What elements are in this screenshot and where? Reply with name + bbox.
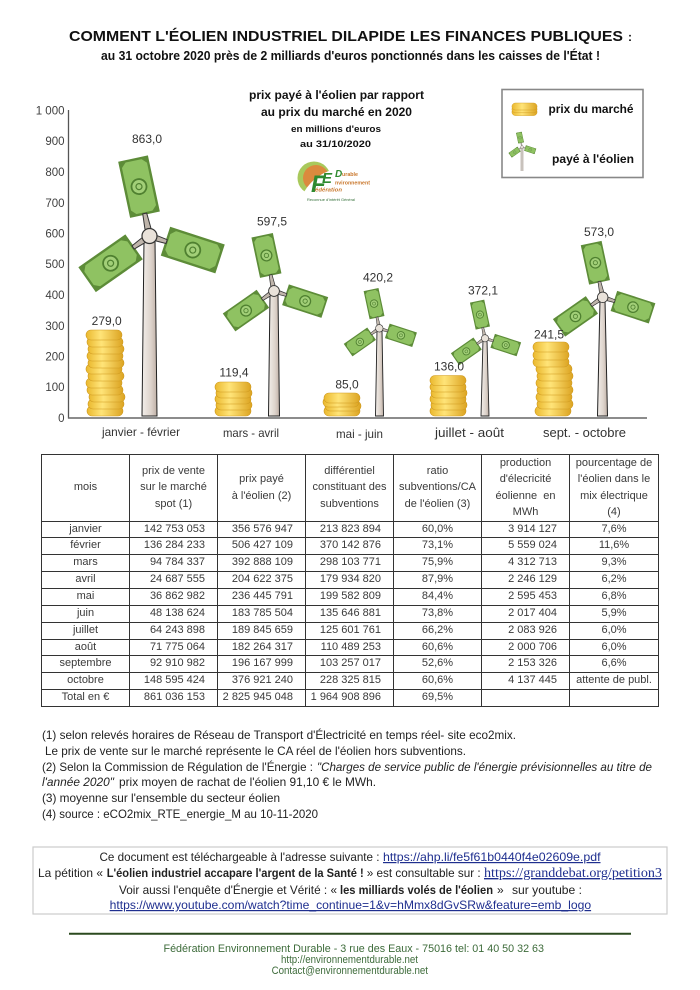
data table: 6,8%: [601, 590, 627, 602]
x axis labels: mars - avril: [223, 426, 279, 440]
data table: 84,4%: [422, 590, 453, 602]
links box: La pétition «: [38, 866, 103, 880]
links box: Ce document est téléchargeable à l'adresse suivante :: [100, 850, 380, 864]
data table: d'élecricité: [500, 473, 551, 485]
data table: 228 325 815: [320, 674, 381, 686]
data table: 24 687 555: [150, 573, 205, 585]
data table: 5,9%: [601, 607, 627, 619]
data table: (4): [607, 506, 621, 518]
logo: F: [311, 171, 327, 198]
data table: juillet: [73, 624, 98, 636]
footer: Fédération Environnement Durable - 3 rue des Eaux - 75016 tel: 01 40 50 32 63: [164, 943, 544, 955]
data table: 2 000 706: [508, 641, 557, 653]
data table: 136 284 233: [144, 539, 205, 551]
data table: 182 264 317: [232, 641, 293, 653]
links box: https://granddebat.org/petition3: [484, 866, 662, 881]
data table: 356 576 947: [232, 522, 293, 534]
data table: mars: [73, 556, 98, 568]
column: mars-avril turbine: [224, 234, 327, 416]
data table: Total en €: [62, 691, 109, 703]
value labels: 420,2: [363, 270, 393, 284]
column: sept-octobre turbine: [554, 242, 654, 416]
data table: 60,0%: [422, 522, 453, 534]
data table: 48 138 624: [150, 607, 205, 619]
data table: 6,2%: [601, 573, 627, 585]
data table: 103 257 017: [320, 657, 381, 669]
footnotes: (1) selon relevés horaires de Réseau de Transport d'Électricité en temps réel- site eco2mix.: [42, 727, 516, 742]
value labels: 136,0: [434, 360, 464, 374]
icon: coin stack: [512, 103, 537, 116]
chart heading: prix payé à l'éolien par rapport: [249, 88, 424, 102]
column: juillet-août turbine: [452, 300, 520, 416]
data table: 64 243 898: [150, 624, 205, 636]
y axis: 1 000: [36, 106, 64, 118]
links box: sur youtube :: [512, 883, 582, 897]
data table: 142 753 053: [144, 522, 205, 534]
data table: 2 083 926: [508, 624, 557, 636]
chart heading: au 31/10/2020: [300, 139, 371, 150]
data table: subventions: [320, 498, 379, 510]
data table: 4 312 713: [508, 556, 557, 568]
data table: 125 601 761: [320, 624, 381, 636]
data table: février: [70, 539, 101, 551]
data table: différentiel: [324, 465, 375, 477]
value labels: [92, 132, 614, 392]
data table: 6,0%: [601, 624, 627, 636]
x axis labels: [101, 425, 626, 441]
data table: l'éolien dans le: [578, 473, 650, 485]
footnotes: (2) Selon la Commission de Régulation de l'Énergie :: [42, 759, 313, 774]
data table: 7,6%: [601, 522, 627, 534]
data table: 298 103 771: [320, 556, 381, 568]
data table: prix de vente: [142, 465, 205, 477]
value labels: 119,4: [219, 366, 249, 380]
value labels: 863,0: [132, 132, 162, 146]
value labels: 85,0: [335, 378, 359, 392]
subtitle: au 31 octobre 2020 près de 2 milliards d'euros ponctionnés dans les caisses de l'État !: [101, 48, 600, 63]
footnotes: (4) source : eCO2mix_RTE_energie_M au 10-11-2020: [42, 807, 318, 821]
links box: [33, 847, 667, 914]
column: sept-octobre coins: [533, 342, 573, 416]
data table: 2 017 404: [508, 607, 557, 619]
y axis: 600: [45, 228, 64, 240]
data table: pourcentage de: [576, 456, 652, 468]
data table: août: [75, 641, 96, 653]
footer: Contact@environnementdurable.net: [272, 965, 428, 977]
data table: 3 914 127: [508, 522, 557, 534]
data table: janvier: [69, 522, 102, 534]
footnotes: Le prix de vente sur le marché représente le CA réel de l'éolien hors subventions.: [45, 744, 466, 758]
data table: mai: [77, 590, 94, 602]
y axis: 900: [45, 136, 64, 148]
data table: 36 862 982: [150, 590, 205, 602]
chart heading: au prix du marché en 2020: [261, 105, 412, 119]
data table: 2 246 129: [508, 573, 557, 585]
data table: 199 582 809: [320, 590, 381, 602]
title: :: [628, 30, 632, 44]
value labels: 597,5: [257, 214, 287, 228]
y axis: 100: [45, 382, 64, 394]
legend: payé à l'éolien: [552, 152, 634, 166]
data table: mois: [74, 481, 97, 493]
y axis: 0: [58, 413, 64, 425]
data table: 69,5%: [422, 691, 453, 703]
legend: prix du marché: [548, 102, 634, 116]
data table: éolienne en: [496, 490, 555, 502]
data table: [41, 454, 659, 707]
data table: mix électrique: [580, 490, 648, 502]
logo: édération: [315, 188, 342, 194]
data table: 71 775 064: [150, 641, 205, 653]
chart heading: [249, 88, 424, 150]
data table: 376 921 240: [232, 674, 293, 686]
footnotes: (3) moyenne sur l'ensemble du secteur éolien: [42, 791, 280, 805]
data table: 148 595 424: [144, 674, 205, 686]
y axis: 300: [45, 321, 64, 333]
data table: sur le marché: [140, 481, 207, 493]
column: janvier-février coins: [86, 330, 125, 416]
data table: 94 784 337: [150, 556, 205, 568]
data table: 204 622 375: [232, 573, 293, 585]
data table: 179 934 820: [320, 573, 381, 585]
data table: 1 964 908 896: [311, 691, 381, 703]
data table: 4 137 445: [508, 674, 557, 686]
data table: attente de publ.: [576, 674, 652, 686]
logo: nvironnement: [335, 180, 370, 186]
data table: 5 559 024: [508, 539, 557, 551]
column: mars-avril coins: [215, 382, 252, 416]
value labels: 372,1: [468, 284, 498, 298]
data table: spot (1): [155, 498, 192, 510]
data table: à l'éolien (2): [232, 490, 291, 502]
data table: 506 427 109: [232, 539, 293, 551]
data table: de l'éolien (3): [405, 498, 470, 510]
column: mai-juin coins: [323, 393, 361, 416]
data table: 189 845 659: [232, 624, 293, 636]
data table: 52,6%: [422, 657, 453, 669]
footnotes: prix moyen de rachat de l'éolien 91,10 € le MWh.: [119, 775, 376, 789]
data table: constituant des: [312, 481, 386, 493]
footnotes: "Charges de service public de l'énergie prévisionnelles au titre de: [317, 760, 652, 774]
logo: D: [335, 169, 342, 180]
footnotes: [42, 727, 652, 821]
data table: 861 036 153: [144, 691, 205, 703]
links box: »: [497, 883, 504, 897]
x axis: [68, 417, 647, 419]
data table: subventions/CA: [399, 481, 476, 493]
y axis: 500: [45, 259, 64, 271]
data table: 2 825 945 048: [223, 691, 293, 703]
logo: Reconnue d'intérêt Général: [307, 198, 355, 202]
data table: 370 142 876: [320, 539, 381, 551]
column: janvier-février turbine: [80, 157, 223, 416]
links box: » est consultable sur :: [367, 866, 481, 880]
icon: money turbine: [509, 132, 536, 171]
data table: septembre: [60, 657, 111, 669]
data table: 11,6%: [599, 539, 629, 551]
data table: 87,9%: [422, 573, 453, 585]
data table: 196 167 999: [232, 657, 293, 669]
legend: [502, 90, 643, 178]
data table: 60,6%: [422, 674, 453, 686]
y axis: [36, 106, 68, 425]
data table: 2 153 326: [508, 657, 557, 669]
logo: [298, 162, 370, 202]
footer: http://environnementdurable.net: [281, 954, 418, 966]
y axis: 200: [45, 352, 64, 364]
data table: 73,8%: [422, 607, 453, 619]
y axis: 700: [45, 198, 64, 210]
data table: MWh: [513, 506, 538, 518]
logo: urable: [342, 172, 358, 178]
data table: production: [500, 456, 551, 468]
data table: 73,1%: [422, 539, 453, 551]
column: mai-juin turbine: [345, 289, 416, 416]
data table: avril: [75, 573, 96, 585]
x axis labels: mai - juin: [336, 427, 383, 441]
y axis: 800: [45, 167, 64, 179]
column: juillet-août coins: [430, 376, 467, 416]
data table: 135 646 881: [320, 607, 381, 619]
data table: 60,6%: [422, 641, 453, 653]
x axis labels: sept. - octobre: [543, 425, 626, 440]
logo: E: [322, 170, 333, 187]
data table: juin: [77, 607, 94, 619]
links box: https://ahp.li/fe5f61b0440f4e02609e.pdf: [383, 850, 601, 864]
data table: 6,0%: [601, 641, 627, 653]
data table: 2 595 453: [508, 590, 557, 602]
links box: https://www.youtube.com/watch?time_continue=1&v=hMmx8dGvSRw&feature=emb_logo: [110, 898, 591, 912]
value labels: 573,0: [584, 225, 614, 239]
data table: 183 785 504: [232, 607, 293, 619]
data table: octobre: [67, 674, 104, 686]
x axis labels: juillet - août: [434, 425, 504, 440]
value labels: 241,5: [534, 328, 564, 342]
chart heading: en millions d'euros: [291, 124, 381, 135]
links box: les milliards volés de l'éolien: [340, 883, 493, 897]
data table: ratio: [427, 465, 448, 477]
data table: 110 489 253: [321, 641, 381, 653]
title: COMMENT L'ÉOLIEN INDUSTRIEL DILAPIDE LES FINANCES PUBLIQUES: [69, 28, 623, 45]
footnotes: l'année 2020": [42, 775, 115, 789]
data table: 9,3%: [601, 556, 627, 568]
data table: 213 823 894: [320, 522, 381, 534]
data table: 392 888 109: [232, 556, 293, 568]
value labels: 279,0: [92, 314, 122, 328]
links box: L'éolien industriel accapare l'argent de la Santé !: [107, 866, 364, 880]
data table: 6,6%: [601, 657, 627, 669]
data table: 66,2%: [422, 624, 453, 636]
data table: 236 445 791: [232, 590, 293, 602]
x axis labels: janvier - février: [101, 425, 180, 439]
links box: Voir aussi l'enquête d'Énergie et Vérité : «: [119, 882, 337, 897]
data table: prix payé: [239, 473, 284, 485]
footer: [164, 943, 544, 977]
y axis: 400: [45, 290, 64, 302]
data table: 92 910 982: [150, 657, 205, 669]
data table: 75,9%: [422, 556, 453, 568]
